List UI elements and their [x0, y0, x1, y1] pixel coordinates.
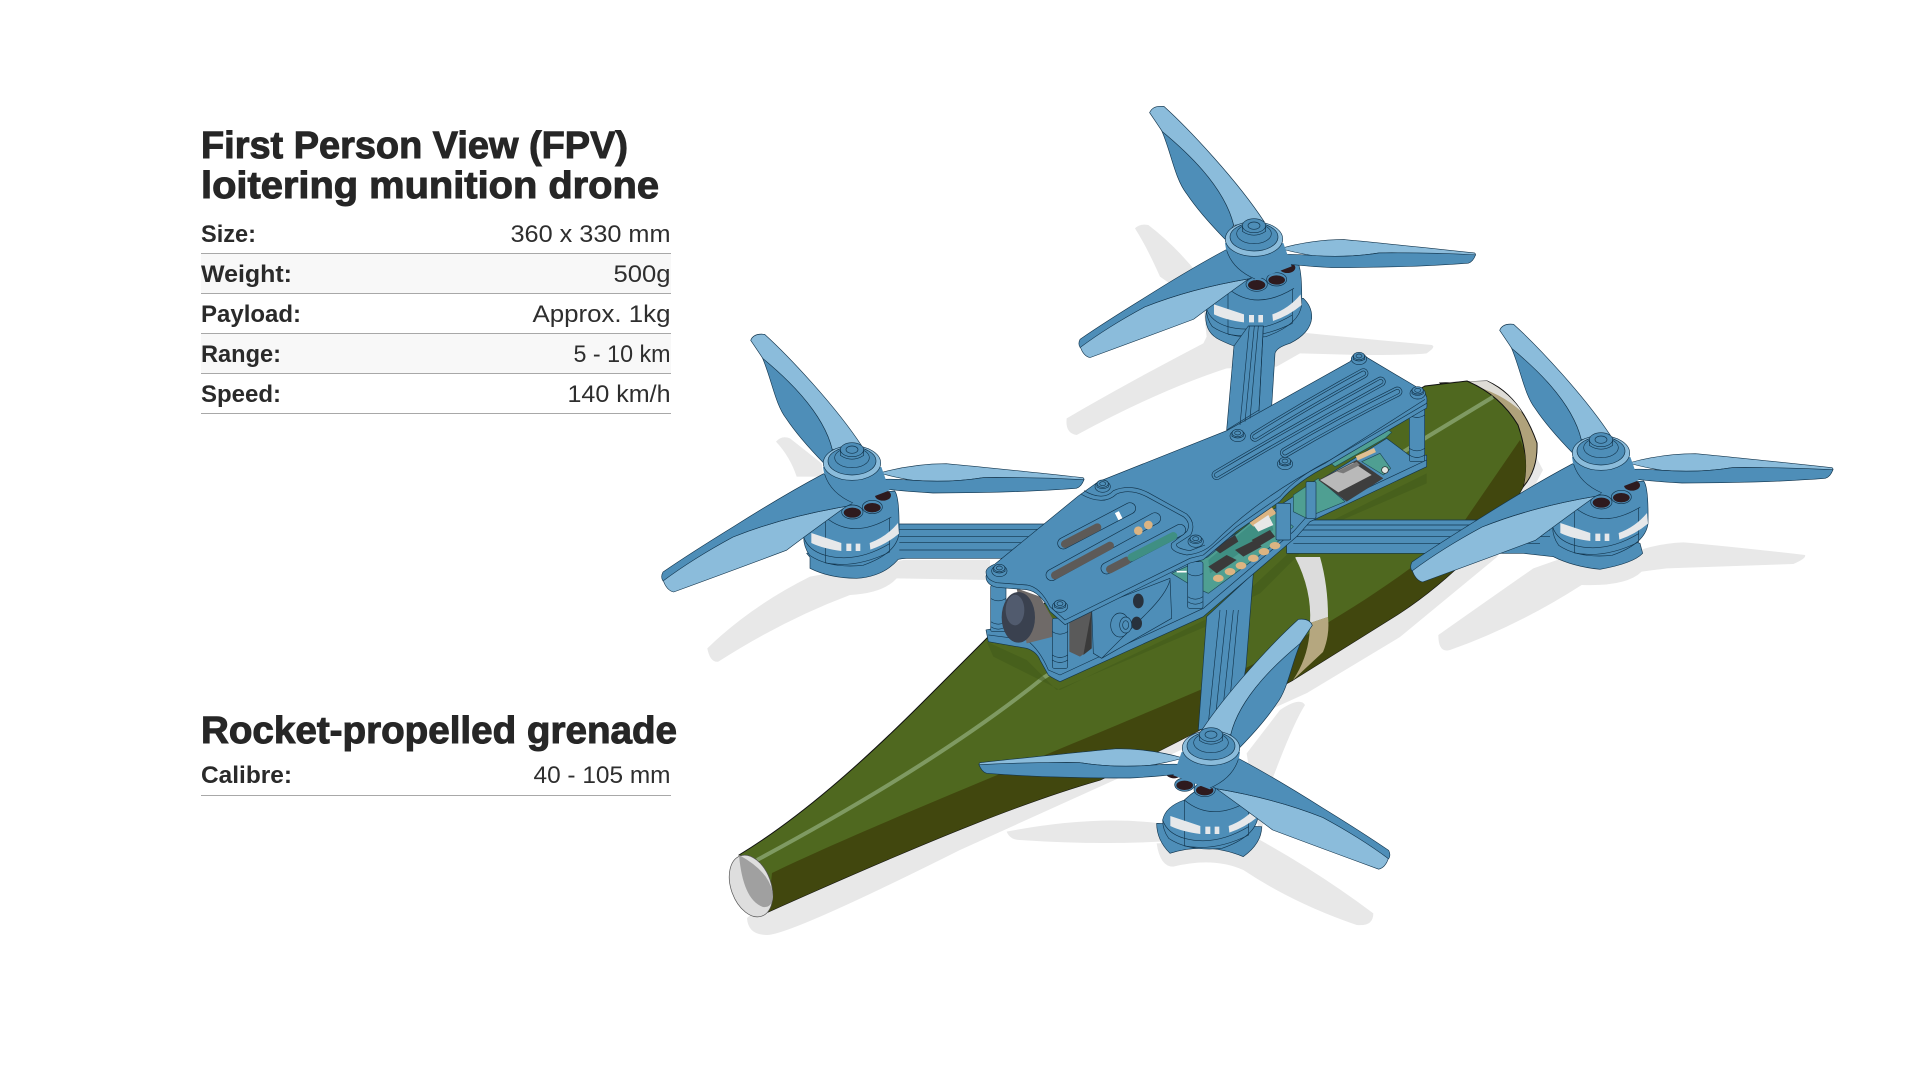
row: payload — [201, 301, 671, 334]
row: speed: Speed: — [201, 381, 281, 408]
heading: rocket-propelled grenade: Rocket-propelled grenade — [201, 710, 677, 752]
panel: drone specifications — [201, 125, 671, 414]
row: payload: Payload: — [201, 301, 301, 328]
top plate raised border — [1081, 399, 1425, 555]
row: speed: 140 km/h — [568, 381, 670, 408]
top plate — [986, 355, 1427, 620]
arm: front — [1157, 573, 1262, 857]
top plate underside thickness — [986, 360, 1427, 625]
grenade highlight line — [757, 397, 1493, 860]
row: range — [201, 341, 671, 374]
grenade lower dark side — [768, 440, 1526, 912]
motor and propeller: left — [662, 334, 1084, 592]
standoffs — [1052, 403, 1425, 668]
row: size: 360 x 330 mm — [510, 221, 670, 248]
frame shadow on grenade — [987, 473, 1427, 690]
motor and propeller: front — [979, 619, 1390, 869]
frame screws — [992, 352, 1425, 612]
motor and propeller: right — [1411, 324, 1833, 582]
heading: drone title — [201, 125, 659, 207]
battery box — [1069, 610, 1092, 657]
row: calibre: Calibre: — [201, 762, 292, 789]
drone frame and electronics — [986, 352, 1427, 682]
row: weight: 500g — [614, 261, 670, 288]
row: range: 5 - 10 km — [574, 341, 670, 368]
panel: grenade specifications — [201, 710, 677, 796]
rear-left standoff — [991, 585, 1006, 632]
heading: drone title: First Person View (FPV) — [201, 125, 628, 167]
arm: left — [807, 524, 1050, 578]
rear slots — [1217, 373, 1397, 475]
rocket-propelled grenade body — [721, 381, 1537, 923]
drone arms and motor bases — [807, 298, 1643, 857]
front slots — [1052, 508, 1180, 575]
row: size: Size: — [201, 221, 256, 248]
rear circuit board — [1293, 428, 1392, 518]
grenade main green fill — [739, 381, 1526, 912]
row: size — [201, 221, 671, 254]
arm: right — [1287, 520, 1643, 569]
grenade bands — [1295, 557, 1328, 623]
grenade rear cap — [1440, 381, 1537, 487]
row: calibre — [201, 762, 671, 796]
grenade tail opening — [721, 849, 781, 923]
arm: rear — [1206, 298, 1312, 432]
row: weight: Weight: — [201, 261, 292, 288]
row: range: Range: — [201, 341, 281, 368]
row: calibre: 40 - 105 mm — [534, 762, 670, 789]
middle circuit board — [1172, 505, 1293, 593]
drone shadows on ground — [707, 225, 1805, 935]
bottom plate — [986, 438, 1427, 682]
row: weight — [201, 261, 671, 294]
row: speed — [201, 381, 671, 414]
row backgrounds — [201, 254, 671, 374]
camera — [1002, 588, 1053, 643]
motor and propeller: rear — [1079, 106, 1476, 430]
heading: drone title: loitering munition drone — [201, 165, 659, 207]
row: payload: Approx. 1kg — [532, 301, 670, 328]
side camera mount — [1092, 578, 1172, 658]
